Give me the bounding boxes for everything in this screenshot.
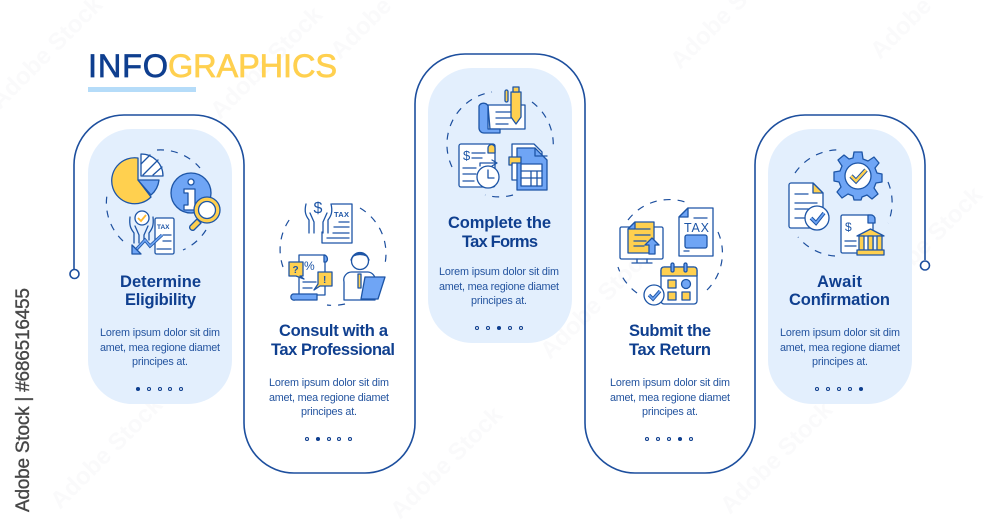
- stock watermark: Adobe Stock: [535, 241, 658, 364]
- text block: principes at.: [812, 356, 868, 368]
- heading: Await: [817, 273, 862, 291]
- icon: forms, pen and calculator: [447, 87, 553, 197]
- progress dots: [646, 438, 692, 440]
- icon: gear, approved document and bank: $: [845, 220, 852, 234]
- stock watermark: Adobe Stock: [45, 391, 168, 514]
- icon: pie chart, info and tax: [106, 150, 220, 254]
- icon: upload, tax form and calendar: [618, 200, 722, 305]
- stock watermark: Adobe Stock: [865, 181, 988, 304]
- connecting outline: [70, 54, 930, 473]
- text block: principes at.: [132, 356, 188, 368]
- panel: determine eligibility: [100, 150, 220, 390]
- text block: Lorem ipsum dolor sit dim: [439, 266, 559, 278]
- text block: Lorem ipsum dolor sit dim: [780, 327, 900, 339]
- icon: upload, tax form and calendar: TAX: [684, 221, 710, 235]
- text block: [780, 327, 900, 368]
- stock watermark: Adobe Stock: [715, 396, 838, 519]
- panel: submit the tax return: [610, 200, 730, 440]
- panel: await confirmation: [780, 150, 900, 390]
- icon: gear, approved document and bank: [789, 150, 892, 256]
- title: INFO: [88, 48, 168, 84]
- heading: Submit the: [629, 322, 711, 340]
- progress dots: [476, 326, 522, 330]
- heading: Consult with a: [279, 322, 389, 340]
- text block: Lorem ipsum dolor sit dim: [269, 377, 389, 389]
- icon: adviser and tax document: ?: [292, 265, 299, 276]
- text block: [610, 377, 730, 418]
- text block: principes at.: [301, 406, 357, 418]
- icon: adviser and tax document: %: [304, 259, 315, 273]
- icon: pie chart, info and tax: TAX: [157, 224, 170, 231]
- icon: adviser and tax document: !: [323, 275, 326, 286]
- text block: Lorem ipsum dolor sit dim: [610, 377, 730, 389]
- text block: amet, mea regione diamet: [269, 392, 389, 404]
- title: GRAPHICS: [168, 48, 337, 84]
- text block: principes at.: [471, 295, 527, 307]
- text block: amet, mea regione diamet: [100, 342, 220, 354]
- stock watermark: Adobe Stock: [205, 1, 328, 124]
- panel: consult with a tax professional: Tax Professional: [271, 341, 395, 359]
- side credit: Adobe Stock | #686516455: [13, 288, 34, 512]
- panel backgrounds: [88, 68, 912, 404]
- text block: amet, mea regione diamet: [780, 342, 900, 354]
- icon: adviser and tax document: [280, 200, 386, 305]
- icon: adviser and tax document: TAX: [334, 210, 349, 219]
- progress dots: [306, 438, 352, 440]
- panel: complete the tax forms: Tax Forms: [462, 233, 538, 251]
- icon: forms, pen and calculator: $: [463, 148, 471, 163]
- icon: adviser and tax document: $: [314, 200, 322, 217]
- panel: await confirmation: Confirmation: [789, 291, 890, 309]
- stock watermark: Adobe Stock: [385, 401, 508, 524]
- panel: complete the tax forms: [439, 87, 559, 330]
- text block: amet, mea regione diamet: [610, 392, 730, 404]
- text block: amet, mea regione diamet: [439, 281, 559, 293]
- panel: determine eligibility: Eligibility: [125, 291, 197, 309]
- panel: consult with a tax professional: [269, 200, 395, 440]
- progress dots: [816, 388, 862, 390]
- text block: [269, 377, 389, 418]
- panel: submit the tax return: Tax Return: [629, 341, 711, 359]
- text block: [439, 266, 559, 307]
- heading: Determine: [120, 273, 201, 291]
- text block: Lorem ipsum dolor sit dim: [100, 327, 220, 339]
- title: [88, 48, 337, 92]
- heading: Complete the: [448, 214, 551, 232]
- text block: [100, 327, 220, 368]
- text block: principes at.: [642, 406, 698, 418]
- progress dots: [136, 388, 182, 390]
